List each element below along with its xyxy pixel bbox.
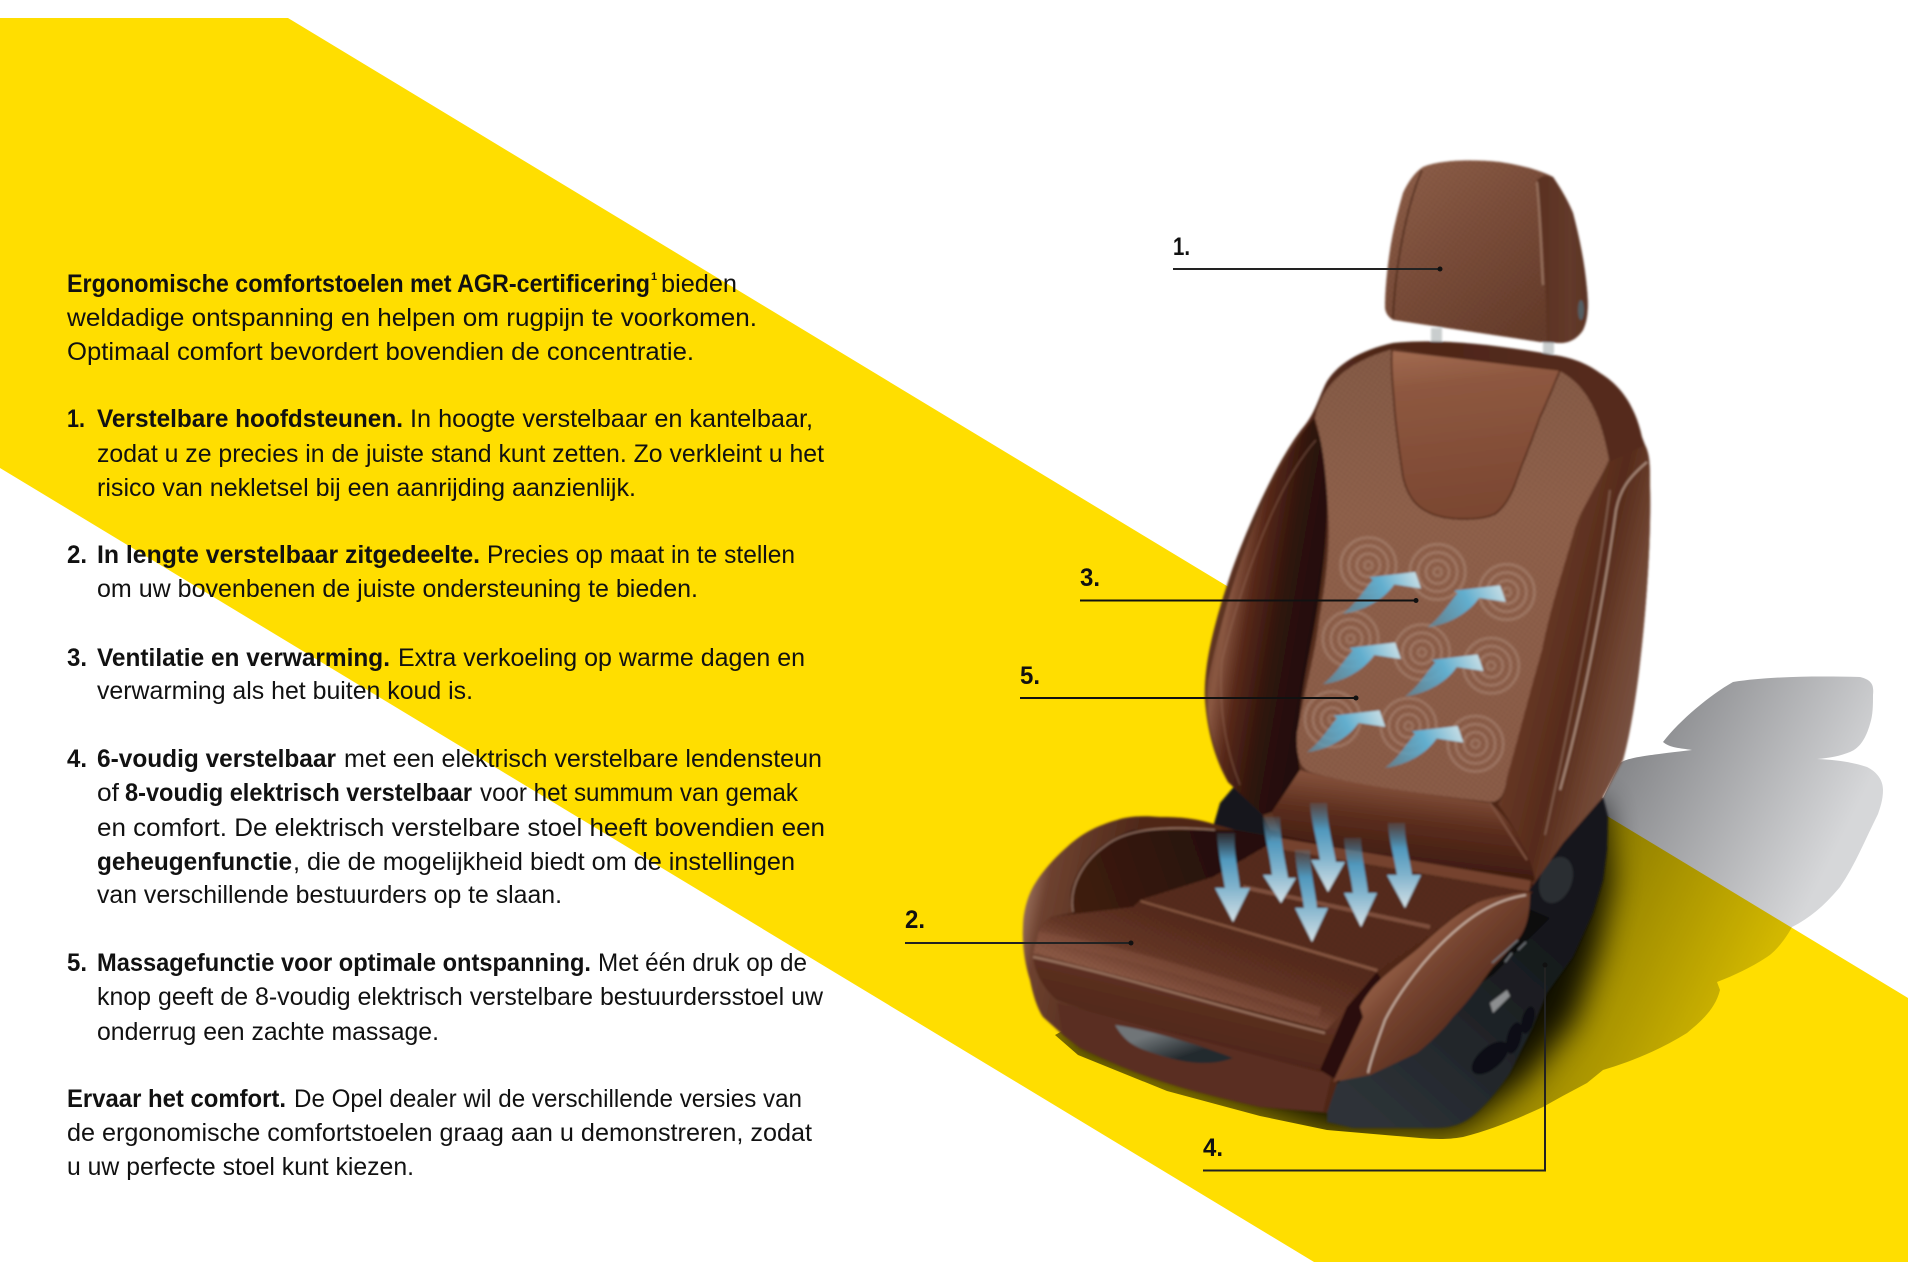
item 4 text: 6-voudig verstelbaar [97,745,336,773]
callout 5: 5. [1020,662,1040,690]
callout 1 [1173,233,1442,272]
fabric panel [1297,349,1609,802]
seat cast shadow [1055,676,1883,1139]
item 5 text: Massagefunctie voor optimale ontspanning. [97,949,591,977]
intro text block: Optimaal comfort bevordert bovendien de concentratie. [67,338,694,366]
callout 3 [1080,564,1418,603]
seat illustration [1023,160,1650,1128]
seat side controls [1466,940,1537,1081]
item 4 text: , die de mogelijkheid biedt om de instellingen [293,848,795,876]
intro text block [66,270,757,366]
intro text block: Ergonomische comfortstoelen met AGR-certificering [67,270,650,298]
right bolster [1498,445,1650,885]
left wing [1207,418,1328,815]
item 1 text: In hoogte verstelbaar en kantelbaar, [410,405,813,433]
item 2 text: 2. [67,541,87,569]
callout 3: 3. [1080,564,1100,592]
callout 5 [1020,662,1358,700]
item 1 text: risico van nekletsel bij een aanrijding aanzienlijk. [97,474,636,502]
item 3 text: Extra verkoeling op warme dagen en [398,644,805,672]
item 2 text: om uw bovenbenen de juiste ondersteuning te bieden. [97,575,698,603]
intro text block: weldadige ontspanning en helpen om rugpijn te voorkomen. [66,304,757,332]
item 4 text: 8-voudig elektrisch verstelbaar [125,779,472,807]
item 3 text [67,644,805,705]
seat cushion [1023,816,1533,1113]
item 4 text: 4. [67,745,87,773]
item 3 text: Ventilatie en verwarming. [97,644,390,672]
item 5 text: Met één druk op de [598,949,807,977]
callout 1: 1. [1173,233,1190,261]
item 5 text: 5. [67,949,87,977]
blue airflow arrows on backrest [1307,572,1506,768]
item 2 text [67,541,795,603]
callout 2 [905,906,1134,946]
under skirt [1057,1003,1333,1112]
item 4 text: van verschillende bestuurders op te slaan. [97,881,562,909]
front lip [1033,957,1347,1072]
closing text block: u uw perfecte stoel kunt kiezen. [67,1153,414,1181]
item 1 text [67,405,824,502]
item 4 text: of [97,779,119,807]
neck cushion [1392,350,1560,519]
backrest [1205,341,1650,885]
item 2 text: Precies op maat in te stellen [487,541,795,569]
callout 2: 2. [905,906,925,934]
item 4 text: voor het summum van gemak [480,779,798,807]
item 1 text: zodat u ze precies in de juiste stand kunt zetten. Zo verkleint u het [97,440,824,468]
item 3 text: 3. [67,644,87,672]
intro text block: 1 [651,271,657,283]
item 4 text: geheugenfunctie [97,848,292,876]
seat rear steps [1140,838,1533,972]
right bolster [1333,893,1530,1082]
seat front surface [1033,902,1377,1030]
intro text block: bieden [661,270,737,298]
massage circles [1305,538,1534,771]
black seat frame [1213,783,1608,1128]
item 2 text: In lengte verstelbaar zitgedeelte. [97,541,480,569]
lower back leather [1272,770,1535,885]
closing text block: De Opel dealer wil de verschillende versies van [294,1085,802,1113]
item 1 text: 1. [67,405,85,433]
closing text block: de ergonomische comfortstoelen graag aan u demonstreren, zodat [67,1119,812,1147]
item 4 text: en comfort. De elektrisch verstelbare stoel heeft bovendien een [97,814,825,842]
blue airflow arrows on cushion [1215,803,1421,942]
item 5 text [67,949,824,1046]
item 5 text: knop geeft de 8-voudig elektrisch verstelbare bestuurdersstoel uw [97,983,824,1011]
item 1 text: Verstelbare hoofdsteunen. [97,405,403,433]
item 4 text: met een elektrisch verstelbare lendensteun [344,745,822,773]
grey dome [1115,1025,1233,1063]
callout 4: 4. [1203,1134,1223,1162]
closing text block [67,1085,812,1181]
item 5 text: onderrug een zachte massage. [97,1018,439,1046]
callout 4 [1203,962,1548,1170]
gap shadow [1320,972,1385,1078]
item 3 text: verwarming als het buiten koud is. [97,677,473,705]
closing text block: Ervaar het comfort. [67,1085,286,1113]
headrest [1385,160,1588,354]
item 4 text [67,745,825,909]
left bolster [1023,816,1533,1113]
